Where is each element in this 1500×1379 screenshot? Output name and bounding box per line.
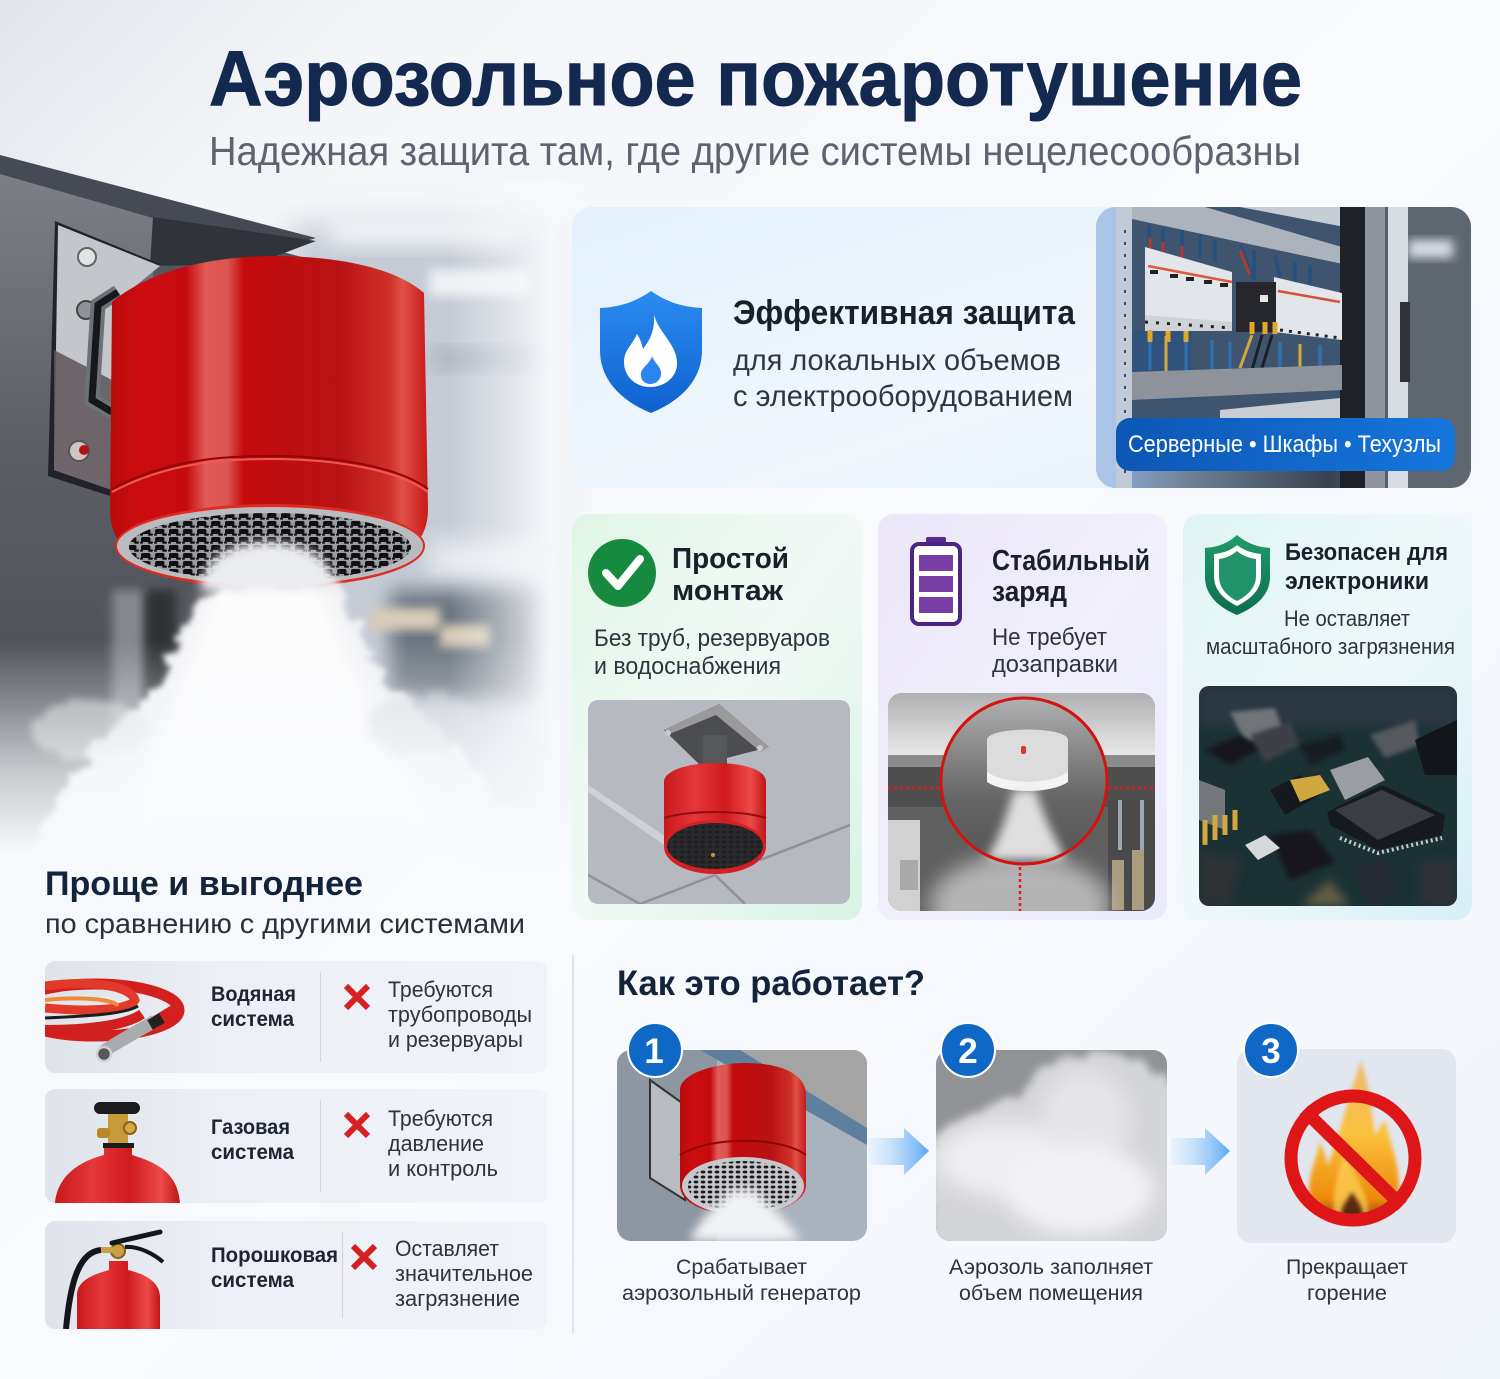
text: powder drawback: Оставляет	[395, 1236, 499, 1261]
heading: simple installation	[672, 543, 789, 607]
hero photo: aerosol generator discharging	[0, 155, 600, 900]
heading: safe for electronics: Безопасен для	[1285, 539, 1448, 566]
panel: stable charge	[878, 514, 1167, 955]
icon: red cross	[353, 1246, 375, 1268]
badge: 3	[1244, 1023, 1298, 1077]
panel: safe for electronics	[1183, 514, 1472, 920]
text: no heavy contamination	[1206, 606, 1455, 659]
heading: simple installation: монтаж	[672, 575, 783, 607]
badge: 2: 2	[958, 1032, 978, 1071]
text: gas drawback: Требуются	[388, 1106, 493, 1131]
photo: ceiling mounted generator	[588, 700, 850, 904]
badge: 2	[941, 1023, 995, 1077]
caption: step 2: объем помещения	[959, 1282, 1143, 1305]
smoke plume	[30, 542, 525, 860]
label: water system: Водяная	[211, 983, 296, 1006]
icon: red cross	[346, 986, 368, 1008]
text: gas drawback: и контроль	[388, 1156, 498, 1181]
panel: effective protection	[572, 207, 1471, 488]
label: powder system: система	[211, 1269, 294, 1292]
photo: aerosol cloud	[936, 1050, 1167, 1241]
label: gas system: Газовая	[211, 1116, 290, 1139]
heading: safe for electronics: электроники	[1285, 568, 1429, 595]
text: water drawback: и резервуары	[388, 1027, 523, 1052]
heading: stable charge: Стабильный	[992, 545, 1150, 577]
caption: step 1	[622, 1256, 861, 1305]
text: no pipes: Без труб, резервуаров	[594, 625, 830, 652]
icon: gas cylinder	[55, 1102, 180, 1203]
text: no refill: Не требует	[992, 624, 1107, 651]
heading: how it works: Как это работает?	[617, 964, 925, 1003]
label: powder system	[211, 1244, 338, 1292]
text: powder drawback: значительное	[395, 1261, 533, 1286]
text: powder drawback: загрязнение	[395, 1286, 520, 1311]
text: no pipes: и водоснабжения	[594, 653, 781, 680]
text: water drawback: трубопроводы	[388, 1002, 532, 1027]
text: no heavy contamination: Не оставляет	[1284, 606, 1410, 631]
red generator cylinder	[110, 256, 428, 590]
text: local volumes: для локальных объемов	[733, 344, 1061, 377]
heading: effective protection: Эффективная защита	[733, 294, 1076, 332]
arrow: step 2 to 3	[1171, 1128, 1230, 1175]
heading: safe for electronics	[1285, 539, 1448, 595]
caption: step 3: Прекращает	[1286, 1256, 1408, 1279]
label: water system	[211, 983, 296, 1031]
mounting bracket	[48, 221, 160, 496]
label pill: server rooms: Серверные • Шкафы • Техузлы	[1128, 431, 1441, 458]
heading: simple installation: Простой	[672, 543, 789, 575]
caption: step 1: аэрозольный генератор	[622, 1282, 861, 1305]
badge: 3: 3	[1261, 1032, 1281, 1071]
photo: circuit board	[1199, 686, 1457, 906]
text: gas drawback: давление	[388, 1131, 484, 1156]
caption: step 2: Аэрозоль заполняет	[949, 1256, 1153, 1279]
icon: red cross	[346, 1114, 368, 1136]
icon: fire hose	[11, 984, 179, 1061]
comparison row: powder system	[45, 1221, 547, 1329]
comparison row: water system	[11, 961, 547, 1073]
text: no heavy contamination: масштабного загрязнения	[1206, 634, 1455, 659]
icon: battery	[912, 537, 960, 624]
text: no pipes	[594, 625, 830, 680]
badge: 1	[628, 1023, 682, 1077]
text: compared with other systems: по сравнению с другими системами	[45, 908, 525, 939]
caption: step 1: Срабатывает	[676, 1256, 807, 1279]
heading: stable charge	[992, 545, 1150, 608]
text: water drawback: Требуются	[388, 977, 493, 1002]
icon: blue shield with flame	[600, 291, 702, 413]
icon: green check	[588, 539, 656, 607]
text: local volumes	[733, 344, 1073, 413]
caption: step 2	[949, 1256, 1153, 1305]
photo: electrical cabinet	[1096, 207, 1471, 488]
label pill: server rooms	[1116, 418, 1455, 471]
caption: step 3: горение	[1307, 1282, 1387, 1305]
icon: crossed-out flame	[1291, 1060, 1415, 1222]
label: powder system: Порошковая	[211, 1244, 338, 1267]
title: Аэрозольное пожаротушение	[209, 34, 1302, 122]
photo: generator	[617, 1050, 867, 1241]
heading: stable charge: заряд	[992, 576, 1067, 608]
label: gas system: система	[211, 1141, 294, 1164]
text: local volumes: с электрооборудованием	[733, 380, 1073, 413]
panel: simple installation	[572, 514, 862, 920]
icon: powder extinguisher	[66, 1232, 163, 1329]
text: no refill: дозаправки	[992, 651, 1118, 678]
text: powder drawback	[395, 1236, 533, 1311]
step 2: aerosol fills room	[936, 1022, 1167, 1304]
text: no refill	[992, 624, 1118, 678]
badge: 1: 1	[644, 1032, 664, 1071]
label: gas system	[211, 1116, 294, 1164]
subtitle: Надежная защита там, где другие системы нецелесообразны	[209, 128, 1301, 174]
text: gas drawback	[388, 1106, 498, 1181]
heading: simpler and cheaper: Проще и выгоднее	[45, 865, 363, 903]
arrow: step 1 to 2	[868, 1128, 929, 1175]
step 3: combustion stops	[1237, 1023, 1456, 1305]
comparison row: gas system	[45, 1089, 547, 1203]
photo: detector in cabinet	[888, 693, 1155, 911]
text: water drawback	[388, 977, 532, 1052]
step 1: generator triggers	[617, 1023, 867, 1305]
label: water system: система	[211, 1008, 294, 1031]
caption: step 3	[1286, 1256, 1408, 1305]
icon: green shield	[1205, 535, 1270, 615]
